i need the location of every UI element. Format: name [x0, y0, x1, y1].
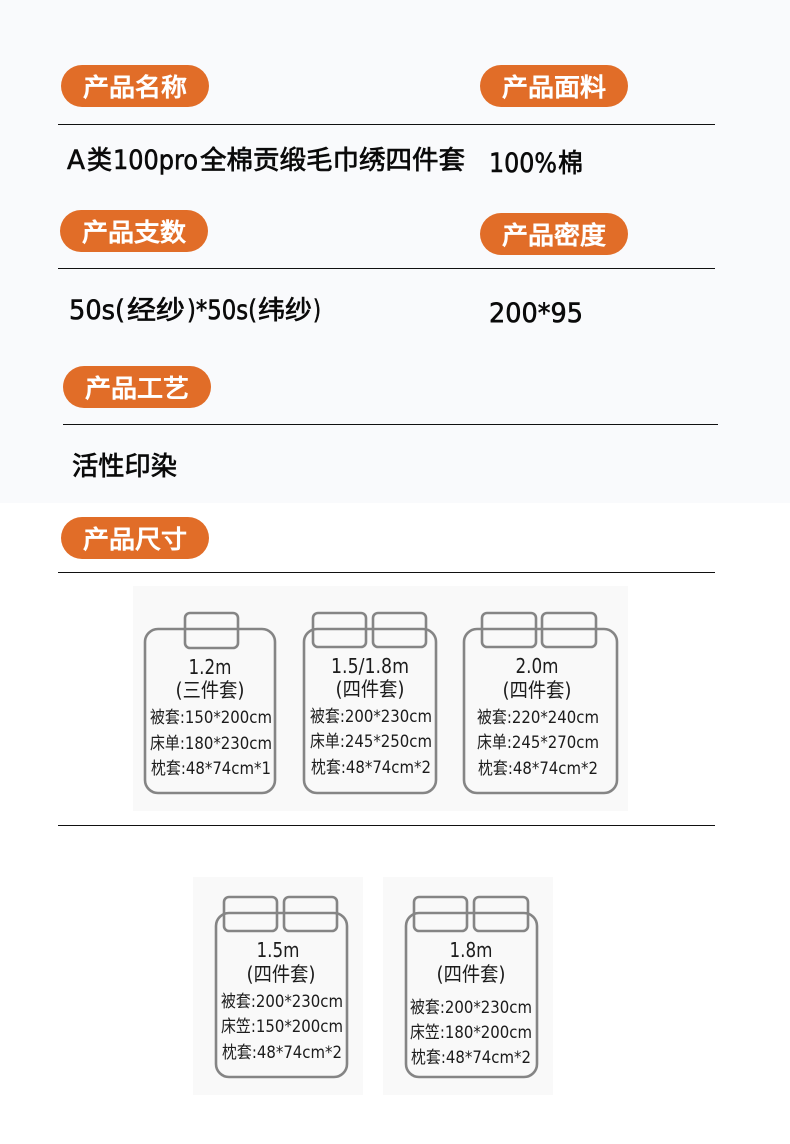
panel: 1.8m fitted-sheet set: 床笠:180*200cm — [410, 1023, 532, 1043]
badge: 产品名称 — [61, 65, 209, 107]
panel: 1.5m fitted-sheet set: 床笠:150*200cm — [221, 1017, 343, 1037]
panel: 1.5m fitted-sheet set: 1.5m — [256, 938, 300, 962]
badge: 产品密度: 产品密度 — [502, 216, 606, 252]
panel: 1.5m fitted-sheet set: (四件套) — [246, 962, 316, 986]
diagram: 1.5/1.8m bed — [304, 613, 436, 793]
text: density: 200*95 — [489, 298, 583, 329]
text: product name — [67, 140, 465, 177]
badge: 产品面料: 产品面料 — [502, 68, 606, 104]
diagram: 1.5/1.8m bed: 枕套:48*74cm*2 — [311, 758, 431, 778]
badge: 产品尺寸 — [61, 517, 209, 559]
diagram: 2.0m bed: 枕套:48*74cm*2 — [478, 759, 598, 779]
panel: 1.8m fitted-sheet set: (四件套) — [436, 962, 506, 986]
text: product name: 类 — [87, 140, 112, 177]
badge: 产品支数: 产品支数 — [82, 213, 186, 249]
text: yarn count: 纬纱 — [258, 290, 312, 327]
text: fabric: 棉 — [558, 143, 583, 180]
badge: 产品工艺 — [63, 366, 211, 408]
text: yarn count — [69, 290, 321, 327]
panel: bed size diagrams, three sizes — [133, 586, 628, 811]
diagram: 1.5/1.8m bed: 床单:245*250cm — [310, 732, 432, 752]
text: yarn count: ) — [313, 295, 321, 326]
diagram: 2.0m bed: 2.0m — [516, 654, 558, 678]
panel: 1.5m fitted-sheet set: 枕套:48*74cm*2 — [222, 1043, 342, 1063]
diagram: 1.5/1.8m bed: 被套:200*230cm — [310, 707, 432, 727]
badge: 产品名称: 产品名称 — [83, 68, 187, 104]
panel: 1.8m fitted-sheet set: 被套:200*230cm — [410, 998, 532, 1018]
badge: 产品工艺: 产品工艺 — [85, 369, 189, 405]
panel: 1.5m fitted-sheet set: 被套:200*230cm — [221, 992, 343, 1012]
diagram: 1.5/1.8m bed: (四件套) — [336, 677, 404, 701]
text: yarn count: )*50s( — [187, 295, 257, 326]
text: fabric — [489, 143, 583, 180]
badge: 产品密度 — [480, 213, 628, 255]
text: yarn count: 经纱 — [127, 290, 185, 327]
panel: 1.8m fitted-sheet set: 枕套:48*74cm*2 — [411, 1048, 531, 1068]
panel: 1.5m fitted-sheet set — [193, 877, 363, 1095]
diagram: 1.2m bed — [145, 613, 275, 793]
diagram: 2.0m bed: 床单:245*270cm — [477, 733, 599, 753]
text: process: 活性印染 — [72, 446, 177, 483]
text: product name: 全棉贡缎毛巾绣四件套 — [200, 140, 465, 177]
badge: 产品面料 — [480, 65, 628, 107]
text: yarn count: 50s( — [69, 295, 125, 326]
badge: 产品尺寸: 产品尺寸 — [83, 520, 187, 556]
panel: 1.8m fitted-sheet set — [383, 877, 553, 1095]
text: product name: A — [67, 145, 86, 176]
badge: 产品支数 — [60, 210, 208, 252]
diagram: 1.2m bed: 被套:150*200cm — [150, 708, 272, 728]
diagram: 1.2m bed: 1.2m — [188, 655, 232, 679]
panel: 1.8m fitted-sheet set: 1.8m — [450, 938, 492, 962]
diagram: 1.5/1.8m bed: 1.5/1.8m — [331, 654, 409, 678]
diagram: 1.2m bed: 枕套:48*74cm*1 — [151, 759, 271, 779]
text: fabric: 100% — [489, 148, 557, 179]
diagram: 2.0m bed — [464, 613, 617, 793]
diagram: 2.0m bed: (四件套) — [502, 678, 572, 702]
diagram: 1.2m bed: 床单:180*230cm — [150, 734, 272, 754]
diagram: 1.2m bed: (三件套) — [176, 678, 244, 702]
diagram: 2.0m bed: 被套:220*240cm — [477, 708, 599, 728]
text: product name: 100pro — [113, 145, 198, 176]
